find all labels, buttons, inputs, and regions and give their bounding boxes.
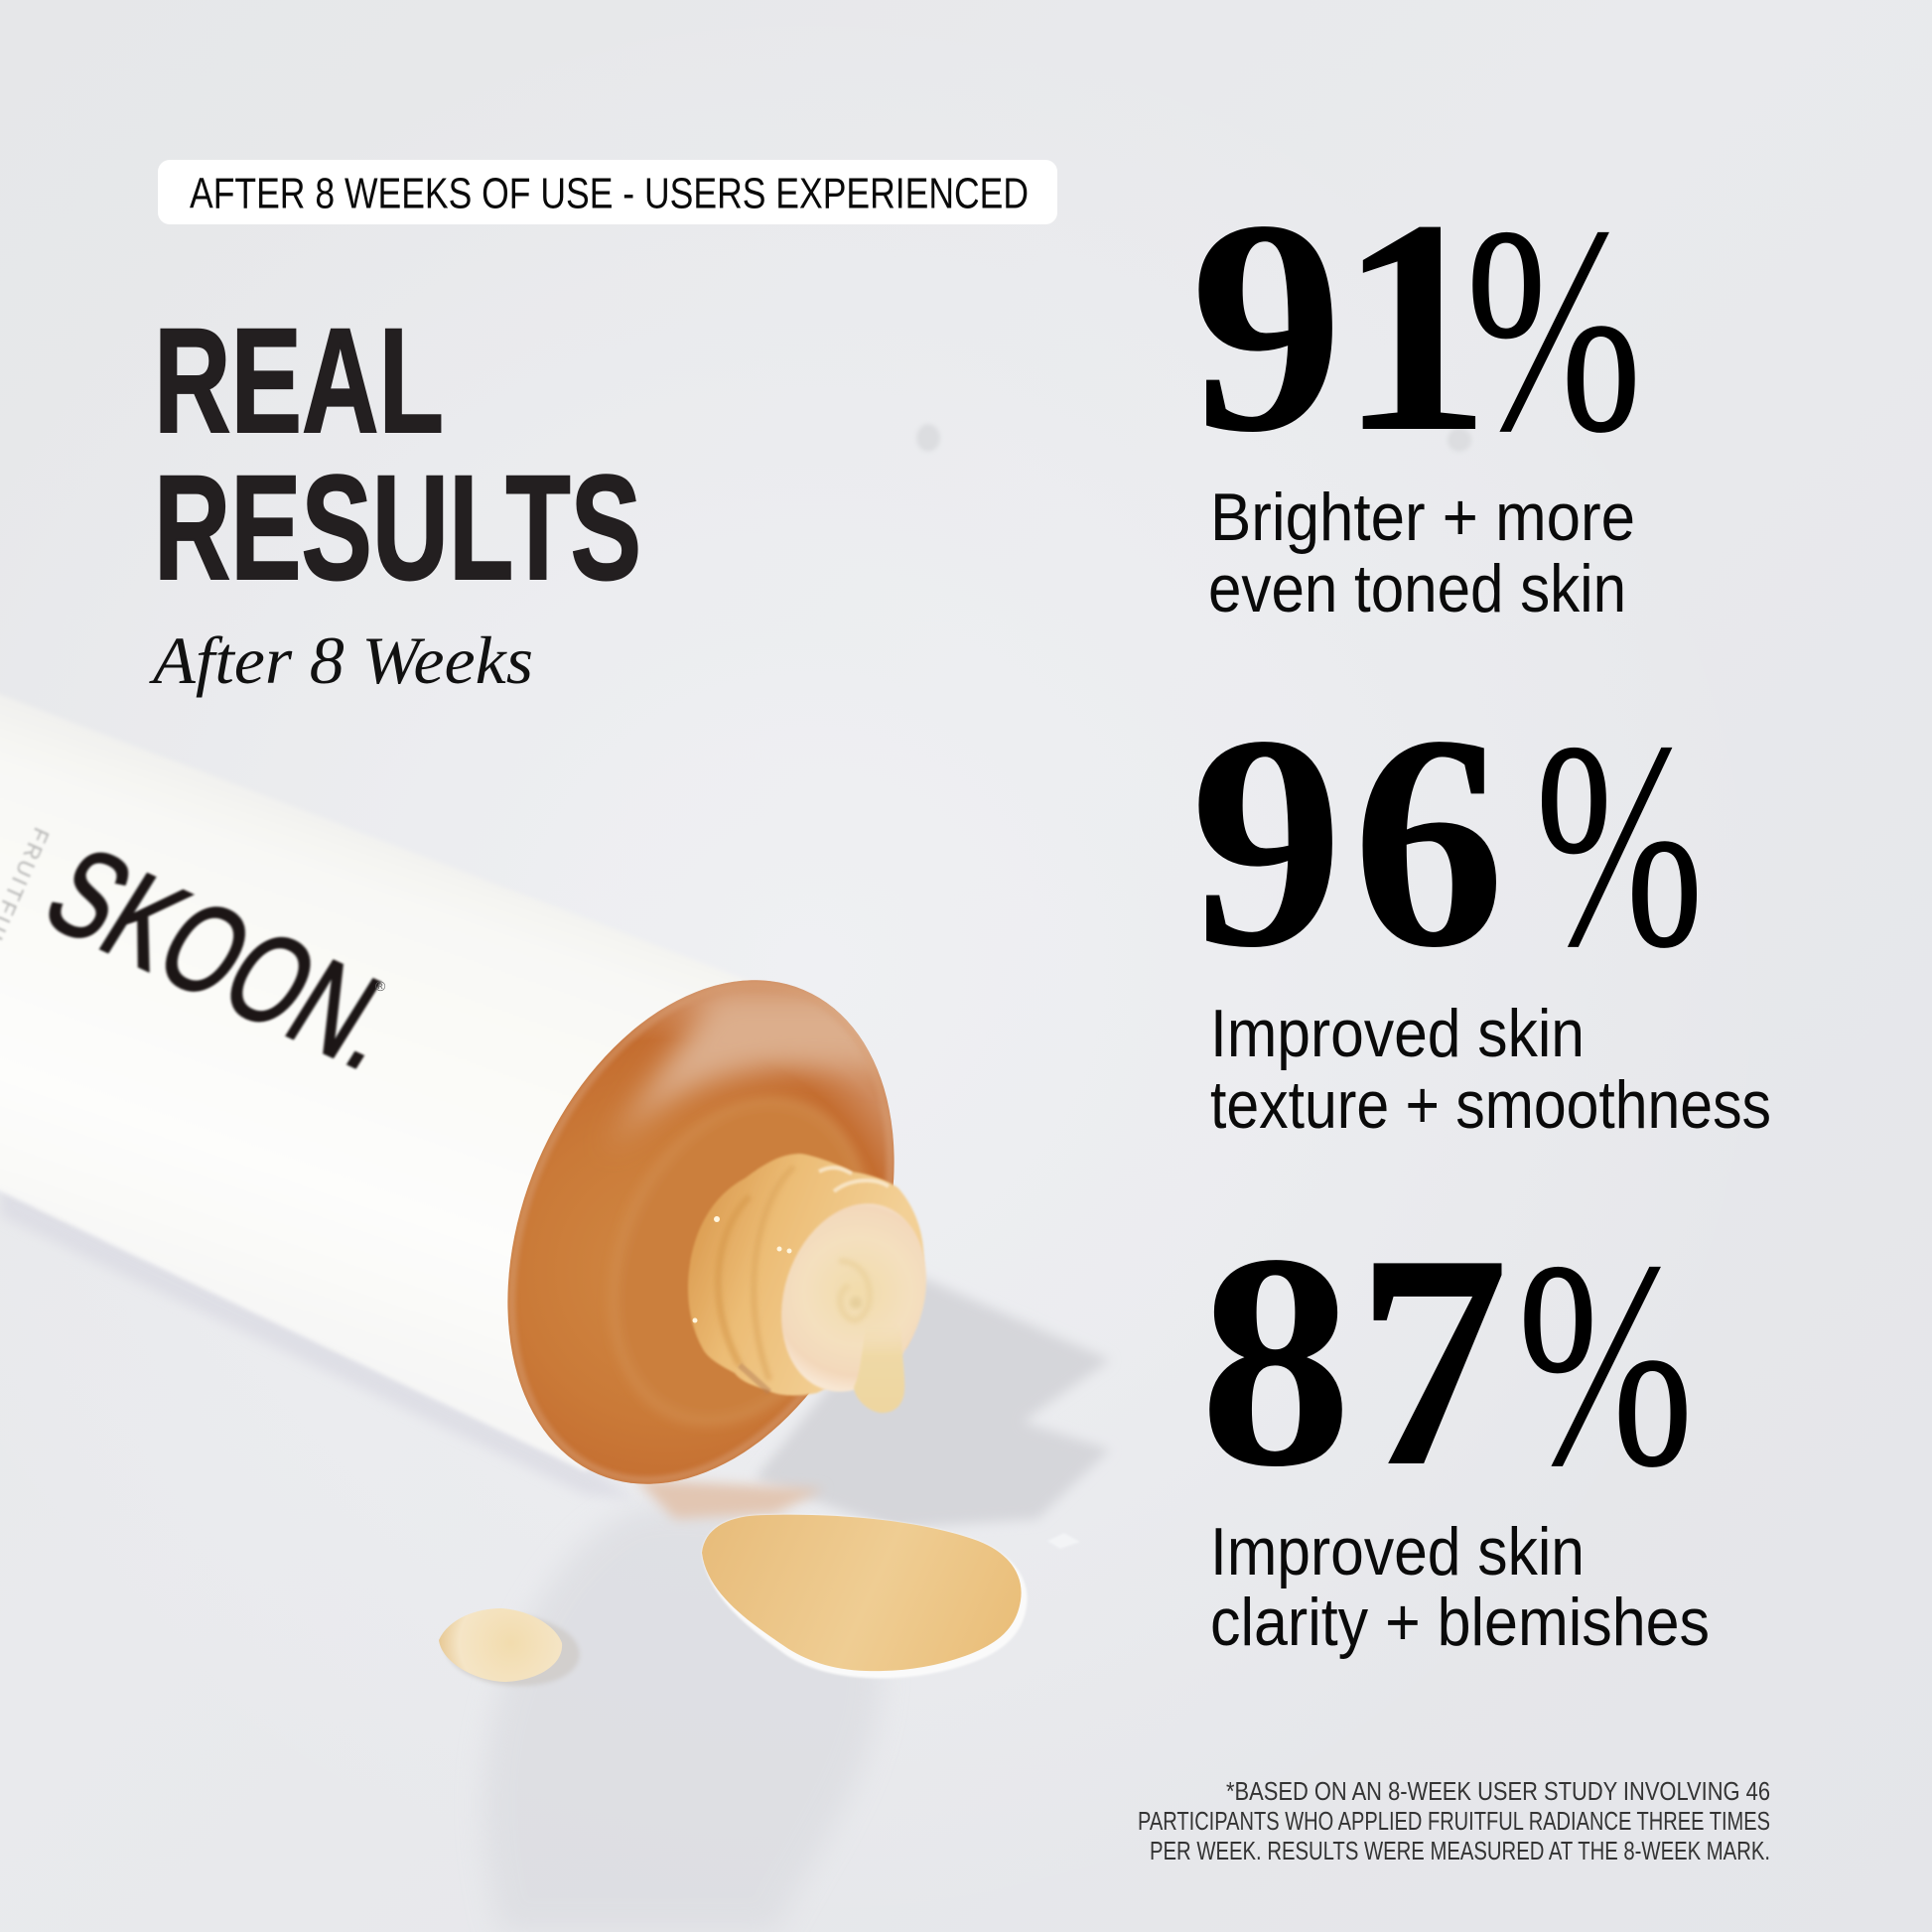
brand wordmark on tube: SKOON. [23, 822, 424, 1095]
frosted rim of disc [508, 997, 894, 1483]
figure 87%: 8 [1199, 1191, 1352, 1530]
amber tube shoulder disc [507, 980, 895, 1484]
small serum droplet [439, 1608, 583, 1692]
footnote: PARTICIPANTS WHO APPLIED FRUITFUL RADIANCE THREE TIMES [1138, 1808, 1770, 1836]
warm reflection under the tube edge [635, 1479, 824, 1519]
figure 87%: % [1517, 1200, 1694, 1528]
inner ring on disc [613, 1095, 865, 1426]
label pill: AFTER 8 WEEKS OF USE - USERS EXPERIENCED [190, 169, 1029, 218]
description: improved texture: Improved skin [1210, 996, 1585, 1071]
description: improved texture: texture + smoothness [1210, 1067, 1771, 1143]
description: improved clarity: Improved skin [1210, 1514, 1585, 1589]
main heading: RESULTS [154, 444, 641, 611]
figure 87%: 7 [1356, 1191, 1509, 1530]
figure 91%: 9 [1190, 157, 1343, 495]
figure 91%: 1 [1338, 157, 1491, 495]
serum drip from nozzle [854, 1319, 904, 1413]
serum puddle [702, 1515, 1028, 1678]
main heading: REAL [154, 297, 444, 464]
main heading [154, 297, 641, 611]
brand wordmark on tube: ® [375, 978, 386, 994]
figure 87% [1199, 1191, 1694, 1530]
reflection on the surface below the tube [484, 1505, 881, 1932]
figure 96%: 6 [1352, 672, 1505, 1011]
product photo: tube, serum and shadows [0, 687, 1110, 1932]
frosted highlight on disc [612, 983, 880, 1142]
water droplets near puddle [1047, 1533, 1080, 1549]
brand wordmark on tube [23, 822, 424, 1095]
footnote: *BASED ON AN 8-WEEK USER STUDY INVOLVING 46 [1226, 1778, 1770, 1806]
footnote [1138, 1778, 1770, 1865]
description: brighter skin [1208, 480, 1635, 626]
cast shadow to the right of the nozzle [755, 1276, 1110, 1529]
stat: 87% [1199, 1191, 1710, 1660]
glass nozzle with serum [688, 1154, 950, 1411]
description: improved clarity: clarity + blemishes [1210, 1585, 1710, 1660]
figure 91%: % [1465, 166, 1642, 493]
contact shadow under the tube [0, 1183, 635, 1499]
description: brighter skin: even toned skin [1208, 551, 1626, 626]
subheading: After 8 Weeks [149, 622, 533, 698]
figure 91% [1190, 157, 1642, 495]
footnote: PER WEEK. RESULTS WERE MEASURED AT THE 8-WEEK MARK. [1150, 1838, 1770, 1865]
stat: 91% [1190, 157, 1642, 626]
figure 96%: 9 [1190, 672, 1343, 1011]
description: brighter skin: Brighter + more [1210, 480, 1635, 555]
description: improved clarity [1210, 1514, 1710, 1660]
stat: 96% [1190, 672, 1771, 1143]
description: improved texture [1210, 996, 1771, 1143]
figure 96%: % [1535, 681, 1704, 1009]
label pill [158, 160, 1057, 224]
nozzle opening face [758, 1184, 950, 1411]
figure 96% [1190, 672, 1704, 1011]
white tube body [0, 687, 755, 1471]
